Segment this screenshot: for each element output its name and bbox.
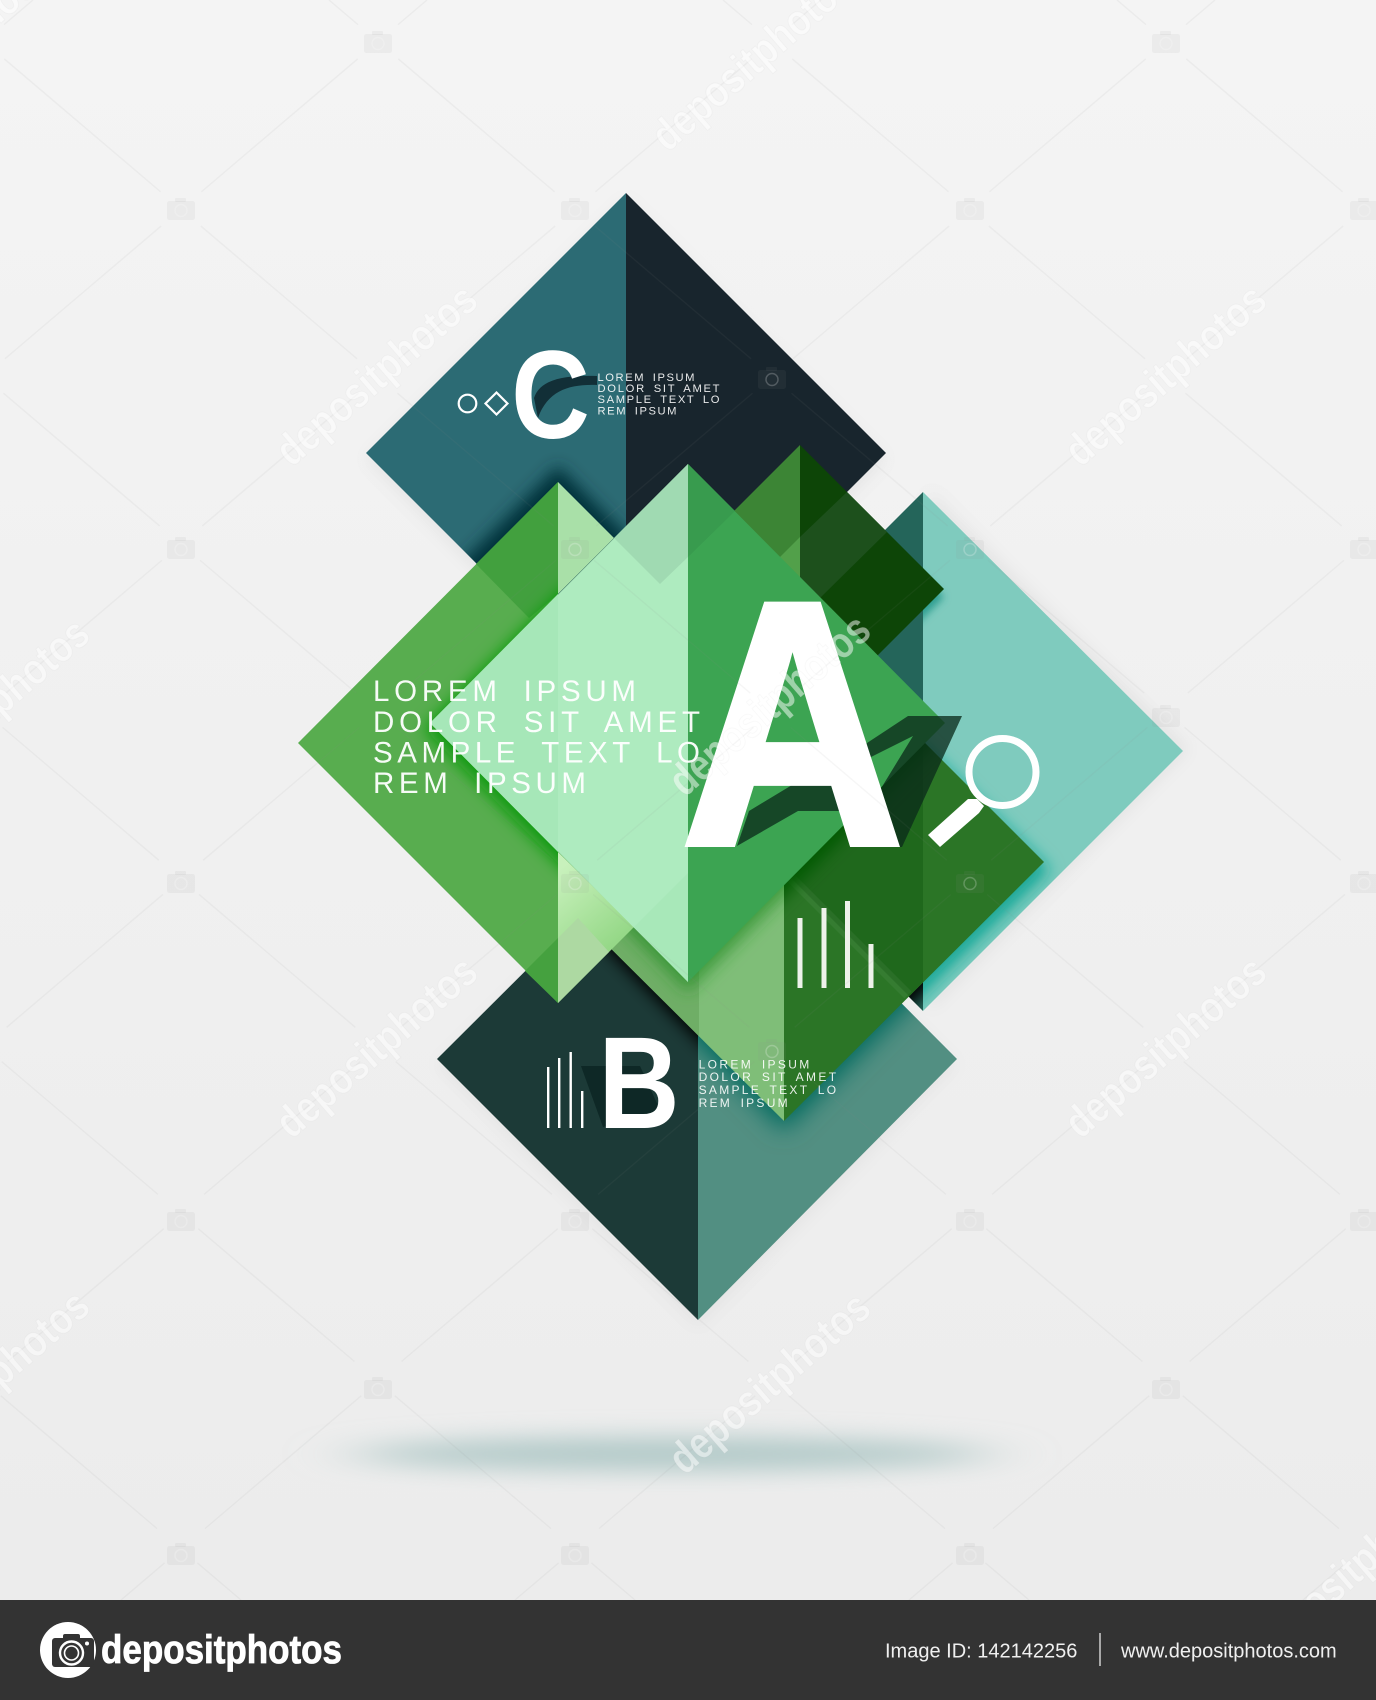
text block: B caption: REM IPSUM	[699, 1096, 788, 1110]
text block: B caption	[699, 1058, 837, 1110]
letter A long shadow	[737, 716, 962, 847]
shadows cast by lower green diamond	[524, 451, 1050, 1131]
panel: left green diamond	[298, 482, 634, 1003]
panel: lower green diamond	[558, 743, 1044, 1121]
website: www.depositphotos.com	[1120, 1640, 1337, 1662]
watermark overlay: depositphotos	[1055, 275, 1276, 476]
divider	[1099, 1633, 1101, 1666]
icon: camera logo	[40, 1622, 96, 1678]
text block: main lorem ipsum: DOLOR SIT AMET	[373, 706, 700, 739]
text block: C caption: REM IPSUM	[598, 406, 676, 418]
text block: main lorem ipsum: REM IPSUM	[373, 767, 586, 800]
footer bar	[0, 1600, 1376, 1700]
letter A: A	[681, 529, 904, 918]
watermark overlay: depositphotos	[659, 605, 880, 806]
text block: main lorem ipsum: SAMPLE TEXT LO	[373, 736, 700, 770]
text block: C caption: DOLOR SIT AMET	[598, 383, 720, 395]
letter B with shadow: B	[598, 1009, 680, 1156]
image id: Image ID: 142142256	[885, 1640, 1077, 1662]
panel: front diamond A	[430, 464, 945, 982]
shadow from front diamond	[418, 582, 558, 878]
text block: main lorem ipsum	[373, 675, 700, 800]
panel: teal diamond	[664, 490, 1189, 1011]
text block: C caption: LOREM IPSUM	[598, 372, 694, 384]
shadow of left diamond on diamond C	[462, 462, 626, 594]
text block: C caption	[598, 372, 720, 418]
text block: B caption: DOLOR SIT AMET	[699, 1070, 837, 1084]
text block: B caption: SAMPLE TEXT LO	[699, 1083, 836, 1097]
panel: diamond C	[366, 193, 886, 719]
watermark overlay: depositphotos	[1055, 947, 1276, 1148]
icon: bars on green	[798, 901, 874, 988]
text block: main lorem ipsum: LOREM IPSUM	[373, 675, 636, 708]
watermark overlay: depositphotos	[266, 947, 487, 1148]
panel: dark green small diamond	[656, 445, 944, 733]
watermark overlay: depositphotos	[266, 275, 487, 476]
watermark overlay: depositphotos	[659, 1283, 880, 1484]
icon: bars near B	[547, 1052, 583, 1128]
shadow from front diamond	[558, 743, 928, 997]
icon: magnifier	[928, 738, 1036, 847]
floating ground shadow	[352, 1437, 992, 1471]
logo wordmark: depositphotos	[101, 1628, 342, 1672]
text block: C caption: SAMPLE TEXT LO	[598, 394, 720, 406]
icon: circle and diamond	[459, 392, 508, 414]
panel: diamond B	[437, 799, 957, 1326]
letter C with shadow: C	[511, 325, 590, 465]
text block: B caption: LOREM IPSUM	[699, 1058, 809, 1072]
